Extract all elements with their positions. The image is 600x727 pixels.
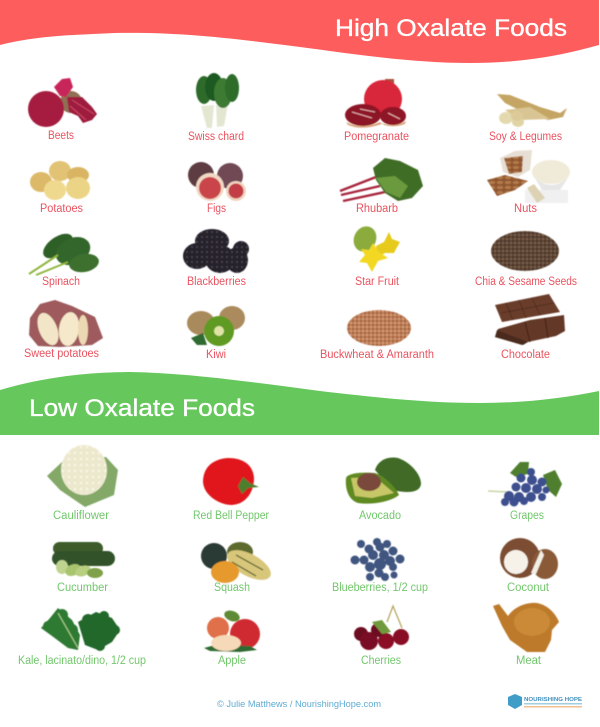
label: Cauliflower	[53, 510, 109, 522]
icon: pomegranate	[345, 79, 406, 128]
label: Pomegranate	[344, 131, 409, 143]
food: meat	[493, 603, 559, 667]
label: Potatoes	[40, 203, 83, 215]
food: cucumber	[52, 542, 115, 594]
icon: potatoes	[30, 161, 90, 200]
icon: blackberries	[183, 229, 249, 273]
label: Apple	[218, 655, 246, 667]
food: grapes	[488, 462, 562, 522]
logo: nourishing hope	[508, 694, 583, 709]
label: Meat	[516, 655, 542, 667]
food: squash	[201, 542, 275, 594]
label: Soy & Legumes	[489, 131, 562, 143]
label: Grapes	[510, 510, 544, 522]
label: Blackberries	[187, 276, 246, 288]
icon: kiwi	[187, 306, 245, 346]
food: swiss chard	[188, 73, 244, 143]
icon: apples	[204, 609, 260, 652]
food: kiwi	[187, 306, 245, 361]
icon: roast chicken	[493, 603, 559, 652]
icon: star fruit	[350, 223, 400, 272]
label: Chia & Sesame Seeds	[475, 276, 577, 288]
icon: rhubarb	[340, 158, 423, 201]
label: Beets	[48, 130, 74, 142]
food: avocado	[346, 458, 421, 522]
banner: low oxalate foods	[0, 372, 599, 435]
icon: avocado	[346, 458, 421, 504]
label: Nuts	[514, 203, 537, 215]
label: Chocolate	[501, 349, 550, 361]
icon: figs	[188, 162, 246, 201]
food: red bell pepper	[193, 458, 269, 522]
icon: chard	[196, 73, 239, 128]
label: Figs	[207, 203, 226, 215]
logo text: NOURISHING HOPE	[524, 697, 583, 703]
icon: spinach	[29, 229, 100, 275]
label: Rhubarb	[356, 203, 398, 215]
food: chocolate	[495, 294, 565, 361]
icon: cherries	[354, 606, 409, 650]
footer credit: © Julie Matthews / NourishingHope.com	[217, 699, 381, 710]
heading: low oxalate foods: Low Oxalate Foods	[29, 395, 255, 422]
food: star fruit	[350, 223, 400, 288]
icon: grapes	[488, 462, 562, 506]
label: Blueberries, 1/2 cup	[332, 582, 428, 594]
label: Avocado	[359, 510, 401, 522]
icon: kale	[41, 608, 120, 651]
label: Kiwi	[206, 349, 226, 361]
icon: chocolate bars	[495, 294, 565, 345]
food: beets	[28, 78, 97, 142]
icon: beet	[28, 78, 97, 127]
label: Star Fruit	[355, 276, 400, 288]
food: cauliflower	[47, 445, 118, 522]
food: cherries	[354, 606, 409, 667]
label: Cucumber	[57, 582, 108, 594]
label: Spinach	[42, 276, 80, 288]
icon: sweet potatoes	[29, 300, 103, 348]
food: buckwheat and amaranth	[320, 310, 434, 361]
food: figs	[188, 162, 246, 215]
food: pomegranate	[344, 79, 409, 143]
icon: grain pile	[347, 310, 411, 346]
label: Sweet potatoes	[24, 348, 99, 360]
food: nuts	[487, 150, 570, 215]
icon: cucumber	[52, 542, 115, 578]
label: Swiss chard	[188, 131, 244, 143]
banner: high oxalate foods	[0, 0, 599, 63]
label: Buckwheat & Amaranth	[320, 349, 434, 361]
icon: blueberries	[350, 538, 404, 581]
icon: pepper	[203, 458, 259, 505]
food: coconut	[500, 538, 558, 594]
icon: seed pile	[491, 231, 559, 271]
label: Coconut	[507, 582, 550, 594]
food: blackberries	[183, 229, 249, 288]
food: potatoes	[30, 161, 90, 215]
food: sweet potatoes	[24, 300, 103, 360]
food: kale	[18, 608, 146, 667]
food: chia and sesame seeds	[475, 231, 577, 288]
food: soy and legumes	[489, 94, 567, 143]
icon: coconut	[500, 538, 558, 579]
food: rhubarb	[340, 158, 423, 215]
icon: cauliflower	[47, 445, 118, 507]
food: blueberries	[332, 538, 428, 594]
label: Red Bell Pepper	[193, 510, 269, 522]
food: spinach	[29, 229, 100, 288]
icon: soy pod and beans	[497, 94, 567, 127]
label: Cherries	[361, 655, 401, 667]
icon: logo shield	[508, 694, 522, 709]
icon: almonds and flour	[487, 150, 570, 203]
label: Squash	[214, 582, 250, 594]
food: apple	[204, 609, 260, 667]
heading: high oxalate foods: High Oxalate Foods	[335, 15, 567, 42]
label: Kale, lacinato/dino, 1/2 cup	[18, 655, 146, 667]
icon: squash	[201, 542, 275, 586]
